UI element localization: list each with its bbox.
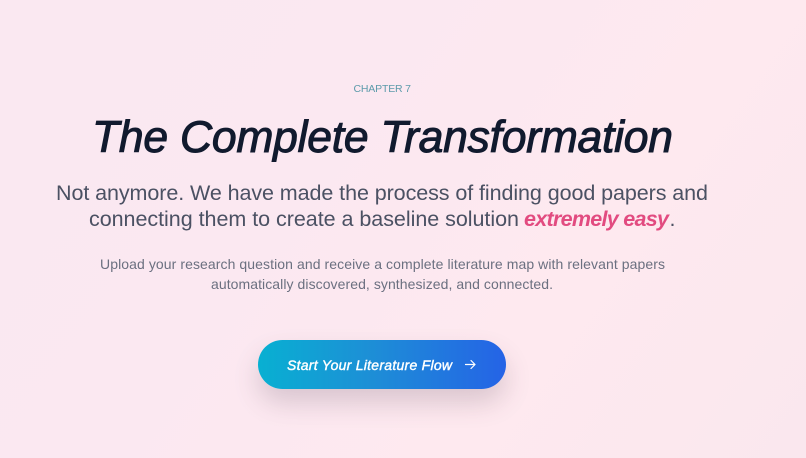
description text: automatically discovered, synthesized, and connected. <box>211 276 553 292</box>
subtitle: connecting them to create a baseline solution <box>89 207 519 231</box>
button label: Start Your Literature Flow <box>287 357 453 373</box>
subtitle: . <box>670 207 675 231</box>
subtitle <box>56 181 708 231</box>
chapter label: CHAPTER 7 <box>354 83 411 95</box>
call-to-action button background <box>258 340 506 389</box>
description text <box>100 256 665 292</box>
title: The Complete Transformation <box>92 113 673 162</box>
description text: Upload your research question and receive a complete literature map with relevant papers <box>100 256 665 272</box>
emphasis: extremely easy: extremely easy <box>524 207 670 231</box>
subtitle: Not anymore. We have made the process of finding good papers and <box>56 181 708 205</box>
icon: arrow <box>466 360 475 368</box>
